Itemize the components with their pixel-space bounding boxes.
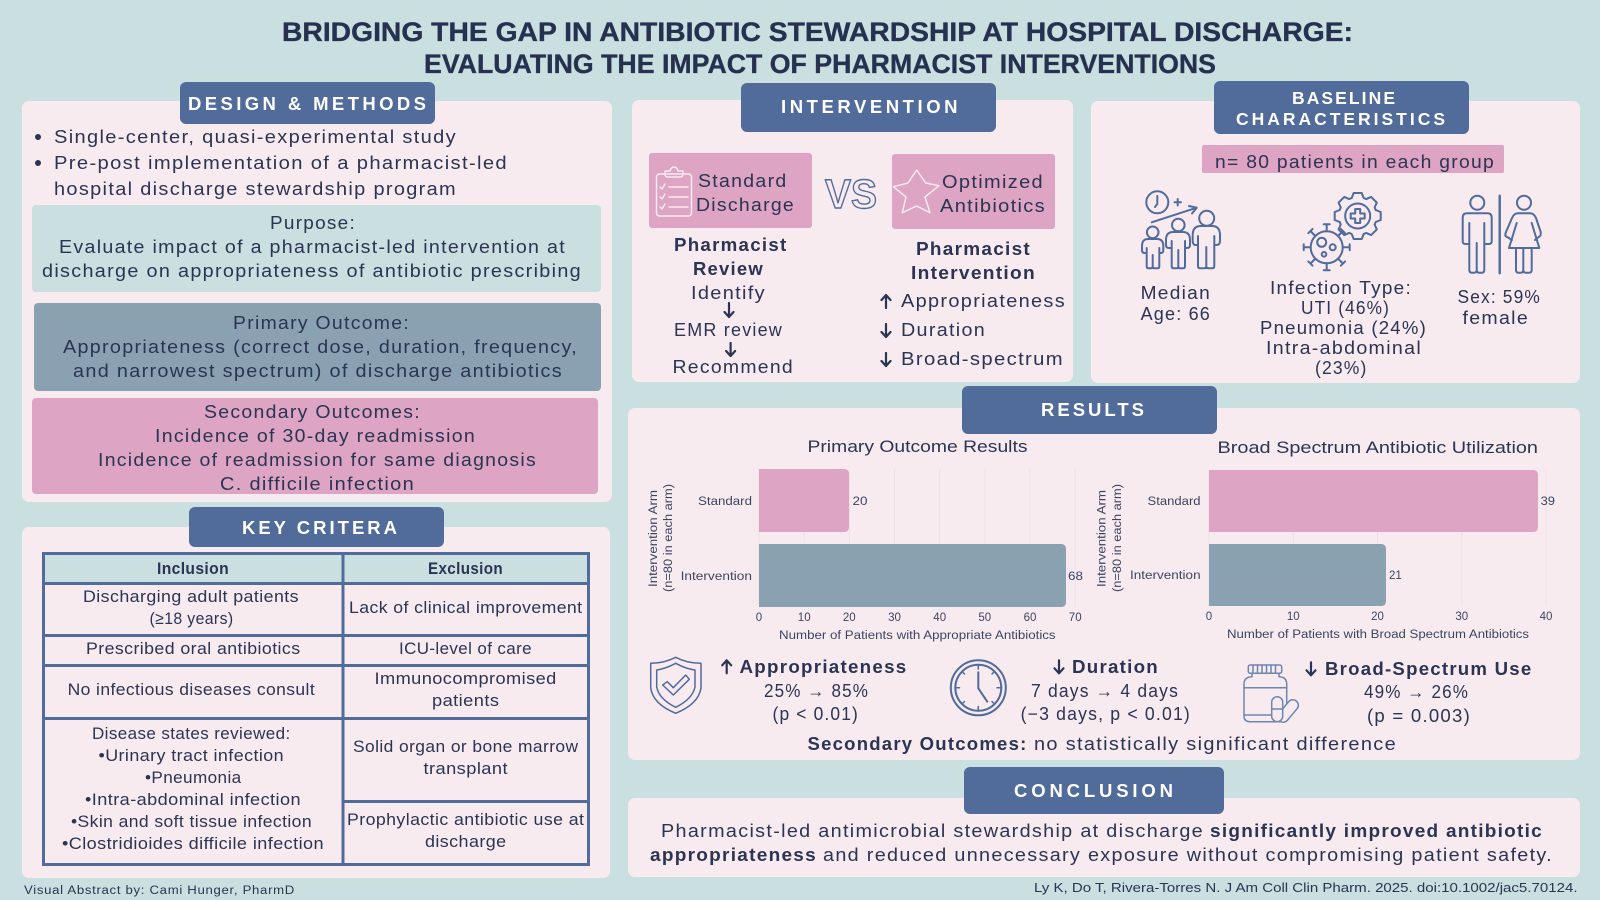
purpose box: Evaluate impact of a pharmacist-led intervention at	[59, 237, 566, 257]
bar chart: broad spectrum antibiotic utilization: Intervention Arm	[1096, 490, 1108, 587]
bar chart: broad spectrum antibiotic utilization: (n=80 in each arm)	[1112, 484, 1124, 592]
bar chart: broad spectrum antibiotic utilization: 21	[1389, 570, 1402, 582]
purpose box: Purpose:	[270, 213, 356, 233]
bar chart: broad spectrum antibiotic utilization: 30	[1455, 611, 1468, 623]
stat: appropriateness: (p < 0.01)	[772, 704, 859, 724]
criteria table: No infectious diseases consult	[68, 680, 315, 699]
icon: clock	[951, 660, 1006, 715]
pharmacist review steps	[672, 235, 794, 377]
study design bullets: Single-center, quasi-experimental study	[54, 127, 457, 147]
optimized antibiotics box	[892, 154, 1055, 229]
heading: results: RESULTS	[1041, 399, 1144, 420]
pharmacist intervention effects: Duration	[901, 320, 986, 340]
panel: design and methods	[22, 82, 612, 502]
criteria table: Exclusion	[428, 559, 503, 578]
stat: broad-spectrum use	[1306, 659, 1532, 726]
conclusion text: appropriateness	[650, 845, 817, 865]
stat: duration: (−3 days, p < 0.01)	[1021, 704, 1191, 724]
criteria table: Disease states reviewed:	[92, 724, 291, 743]
criteria table: (≥18 years)	[150, 609, 234, 628]
icon: medicine bottle	[1244, 665, 1301, 724]
panel: key criteria	[22, 507, 610, 878]
standard discharge box: Discharge	[696, 195, 795, 215]
icon: clipboard	[656, 167, 692, 216]
study design bullets: Pre-post implementation of a pharmacist-led	[54, 153, 508, 173]
pharmacist review steps: EMR review	[674, 320, 783, 340]
title	[282, 17, 1353, 79]
secondary outcomes box: Secondary Outcomes:	[204, 402, 421, 422]
stat: duration: 7 days → 4 days	[1031, 681, 1179, 701]
icon: people and age	[1142, 191, 1220, 268]
bar chart: primary outcome results: 20	[852, 496, 868, 508]
criteria table: Inclusion	[157, 559, 229, 578]
stat: appropriateness	[722, 657, 908, 724]
bar chart: primary outcome results: 10	[798, 612, 811, 624]
bar chart: primary outcome results: Intervention Arm	[648, 490, 660, 587]
heading: design and methods: DESIGN & METHODS	[188, 93, 426, 114]
optimized antibiotics box: Optimized	[942, 172, 1044, 192]
criteria table: Lack of clinical improvement	[349, 598, 582, 617]
secondary outcomes box: Incidence of 30-day readmission	[155, 426, 476, 446]
criteria table: discharge	[425, 832, 506, 851]
bar chart: broad spectrum antibiotic utilization: 39	[1541, 496, 1555, 508]
icon: star	[893, 170, 939, 213]
primary outcome box: Primary Outcome:	[233, 313, 410, 333]
infection type text: Intra-abdominal	[1266, 338, 1422, 358]
panel: intervention	[632, 83, 1073, 382]
pharmacist intervention effects	[882, 239, 1066, 369]
bar chart: broad spectrum antibiotic utilization: Standard	[1148, 496, 1201, 508]
stat: broad-spectrum use: 49% → 26%	[1364, 682, 1469, 702]
pharmacist review steps: Identify	[691, 283, 766, 303]
criteria table: Immunocompromised	[374, 669, 557, 688]
bar chart: broad spectrum antibiotic utilization: 20	[1371, 611, 1384, 623]
bar chart: primary outcome results: Intervention	[681, 571, 752, 583]
pharmacist review steps: Review	[693, 259, 764, 279]
icon: shield	[651, 657, 701, 713]
infection type text: UTI (46%)	[1301, 298, 1390, 318]
bar chart: primary outcome results: 30	[888, 612, 901, 624]
bar chart: primary outcome results: 0	[756, 612, 762, 624]
title: BRIDGING THE GAP IN ANTIBIOTIC STEWARDSHIP AT HOSPITAL DISCHARGE:	[282, 17, 1353, 47]
heading: conclusion: CONCLUSION	[1014, 780, 1173, 801]
bar chart: primary outcome results: 68	[1068, 571, 1083, 583]
heading: conclusion	[964, 767, 1224, 814]
criteria table: Prescribed oral antibiotics	[86, 639, 300, 658]
infection type text	[1260, 278, 1427, 378]
stat: appropriateness: 25% → 85%	[764, 681, 869, 701]
pharmacist intervention effects: Pharmacist	[916, 239, 1031, 259]
panel: conclusion	[628, 767, 1580, 877]
criteria table: Discharging adult patients	[83, 587, 299, 606]
criteria table: Prophylactic antibiotic use at	[347, 810, 584, 829]
icon: virus and gear	[1304, 193, 1381, 270]
heading: baseline characteristics	[1214, 81, 1469, 134]
heading: baseline characteristics: CHARACTERISTICS	[1236, 109, 1445, 129]
secondary outcomes statement: no statistically significant difference	[1034, 734, 1397, 754]
criteria table: patients	[432, 691, 499, 710]
bar chart: primary outcome results: Number of Patients with Appropriate Antibiotics	[779, 630, 1056, 642]
icon: male and female figures	[1463, 196, 1541, 273]
citation: Ly K, Do T, Rivera-Torres N. J Am Coll Clin Pharm. 2025. doi:10.1002/jac5.70124.	[1034, 881, 1578, 895]
criteria table: ICU-level of care	[399, 639, 532, 658]
pharmacist review steps: Pharmacist	[674, 235, 788, 255]
criteria table: •Pneumonia	[145, 768, 242, 787]
criteria table: •Urinary tract infection	[98, 746, 284, 765]
pharmacist intervention effects: Intervention	[911, 263, 1036, 283]
standard discharge box: Standard	[698, 171, 788, 191]
bar chart: primary outcome results: Primary Outcome Results	[808, 438, 1028, 456]
pharmacist intervention effects: Appropriateness	[901, 291, 1066, 311]
stat: duration: Duration	[1072, 657, 1159, 677]
heading: design and methods	[180, 82, 435, 124]
credit line: Visual Abstract by: Cami Hunger, PharmD	[24, 885, 295, 897]
infection type text: Pneumonia (24%)	[1260, 318, 1427, 338]
study design bullets	[35, 127, 508, 199]
criteria table: Solid organ or bone marrow	[353, 737, 579, 756]
criteria table	[43, 553, 589, 865]
vs label: VS	[825, 171, 877, 217]
secondary outcomes statement: Secondary Outcomes:	[808, 734, 1028, 754]
criteria table: •Skin and soft tissue infection	[71, 812, 312, 831]
stat: duration	[1021, 657, 1191, 724]
bar chart: broad spectrum antibiotic utilization: Intervention	[1130, 570, 1201, 582]
sample size tag: n= 80 patients in each group	[1215, 152, 1495, 172]
bar chart: primary outcome results: Standard	[698, 496, 752, 508]
conclusion text	[650, 821, 1553, 865]
bar chart: primary outcome results	[648, 438, 1083, 642]
heading: intervention	[741, 83, 996, 132]
heading: baseline characteristics: BASELINE	[1292, 88, 1395, 108]
pharmacist intervention effects: Broad-spectrum	[901, 349, 1064, 369]
sample size tag	[1202, 145, 1504, 173]
criteria table: •Clostridioides difficile infection	[62, 834, 324, 853]
study design bullets: hospital discharge stewardship program	[54, 179, 457, 199]
conclusion text: significantly improved antibiotic	[1210, 821, 1543, 841]
conclusion text: Pharmacist-led antimicrobial stewardship at discharge	[661, 821, 1204, 841]
sex text: Sex: 59%	[1458, 287, 1541, 307]
optimized antibiotics box: Antibiotics	[940, 196, 1046, 216]
bar chart: broad spectrum antibiotic utilization	[1096, 439, 1555, 641]
infection type text: Infection Type:	[1270, 278, 1412, 298]
secondary outcomes box: C. difficile infection	[220, 474, 415, 494]
infection type text: (23%)	[1315, 358, 1368, 378]
primary outcome box	[34, 303, 601, 391]
stat: broad-spectrum use: (p = 0.003)	[1367, 706, 1471, 726]
criteria table: transplant	[424, 759, 508, 778]
pharmacist review steps: Recommend	[672, 357, 794, 377]
bar chart: broad spectrum antibiotic utilization: 40	[1540, 611, 1552, 623]
bar chart: primary outcome results: 70	[1069, 612, 1082, 624]
bar chart: broad spectrum antibiotic utilization: Broad Spectrum Antibiotic Utilization	[1218, 439, 1538, 457]
primary outcome box: and narrowest spectrum) of discharge antibiotics	[73, 361, 563, 381]
secondary outcomes box: Incidence of readmission for same diagnosis	[98, 450, 537, 470]
purpose box	[32, 205, 601, 292]
secondary outcomes box	[32, 398, 598, 494]
heading: intervention: INTERVENTION	[781, 96, 958, 117]
median age text	[1141, 283, 1211, 324]
panel: results	[628, 386, 1580, 760]
purpose box: discharge on appropriateness of antibiotic prescribing	[42, 261, 582, 281]
title: EVALUATING THE IMPACT OF PHARMACIST INTERVENTIONS	[424, 49, 1216, 79]
panel: baseline characteristics	[1091, 81, 1580, 383]
sex text	[1458, 287, 1541, 328]
secondary outcomes statement	[808, 734, 1397, 754]
heading: results	[962, 386, 1217, 434]
bar chart: primary outcome results: 60	[1024, 612, 1036, 624]
conclusion text: and reduced unnecessary exposure without compromising patient safety.	[823, 845, 1553, 865]
bar chart: primary outcome results: 20	[843, 612, 856, 624]
criteria table: •Intra-abdominal infection	[85, 790, 301, 809]
bar chart: broad spectrum antibiotic utilization: 0	[1206, 611, 1212, 623]
median age text: Age: 66	[1141, 304, 1211, 324]
bar chart: primary outcome results: 40	[933, 612, 946, 624]
bar chart: broad spectrum antibiotic utilization: Number of Patients with Broad Spectrum Antibiotics	[1227, 629, 1529, 641]
primary outcome box: Appropriateness (correct dose, duration, frequency,	[63, 337, 578, 357]
stat: broad-spectrum use: Broad-Spectrum Use	[1325, 659, 1532, 679]
bar chart: broad spectrum antibiotic utilization: 10	[1287, 611, 1300, 623]
heading: key criteria	[189, 507, 444, 547]
heading: key criteria: KEY CRITERA	[242, 517, 397, 538]
sex text: female	[1462, 308, 1529, 328]
median age text: Median	[1141, 283, 1211, 303]
bar chart: primary outcome results: (n=80 in each arm)	[663, 484, 675, 592]
stat: appropriateness: Appropriateness	[740, 657, 908, 677]
bar chart: primary outcome results: 50	[978, 612, 991, 624]
standard discharge box	[649, 153, 812, 228]
